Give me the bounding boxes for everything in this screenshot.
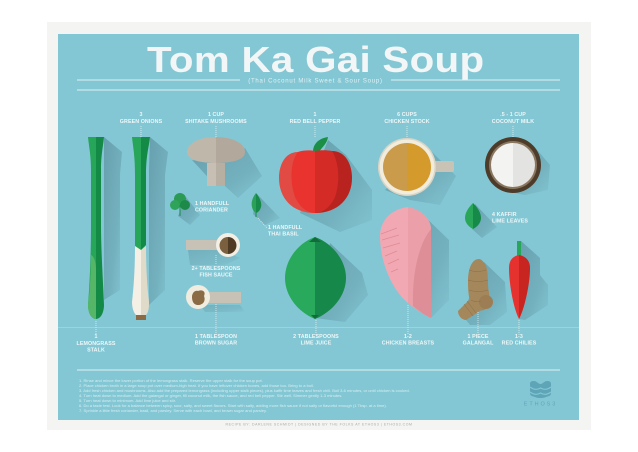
ingredient: brown sugar spoon: BROWN SUGAR [195,340,237,346]
ingredient: chicken breast [380,207,449,346]
ingredient: coconut milk: .5 - 1 CUP [500,112,526,118]
ingredient: green onion: 3 [139,112,143,118]
ingredient: lemongrass: 1 [94,334,98,340]
ingredient: thai basil [252,193,303,238]
ingredient: red bell pepper: RED BELL PEPPER [290,119,340,125]
recipe instructions: 3. Add fresh chicken and mushrooms. Also add the prepared lemongrass (including upper stalk pieces), plus kaffir lime leaves and fresh chili. Boil 3-6 minutes, or until chicken is cooked. [79,388,410,393]
poster background [58,34,579,420]
recipe instructions [79,378,410,413]
recipe instructions: 7. Sprinkle a little fresh coriander, basil, and parsley. Serve with each bowl, and brown sugar and parsley. [79,408,267,413]
ingredient: red chilies: RED CHILIES [502,340,537,346]
ingredient: red chilies: 1-3 [515,334,523,340]
ingredient: chicken stock: 6 CUPS [397,112,417,118]
ingredient: galangal [458,259,507,346]
recipe instructions: 6. Do a taste test. Look for a balance between spicy, sour, salty, and sweet flavors. Start with salty, adding more fish sauce if not salty or flavorful enough (1 Tbsp. at a time). [79,403,387,408]
ingredient: chicken stock: CHICKEN STOCK [384,119,430,125]
ingredient: fish sauce spoon [186,233,241,278]
recipe instructions: 4. Turn heat down to medium. Add the galangal or ginger, fill coconut milk, the fish sauce, and red bell pepper. Stir well. Simmer gently 1-3 minutes. [79,393,342,398]
ingredient: green onion [120,112,168,320]
ingredient: chicken stock [378,112,456,205]
ingredient: fish sauce spoon: 2+ TABLESPOONS [192,266,241,272]
baseline rule [58,326,579,329]
ingredient: shiitake mushroom: 1 CUP [208,112,224,118]
paper sheet [47,22,591,430]
recipe instructions: 1. Rinse and mince the lower portion of the lemongrass stalk. Reserve the upper stalk for the soup pot. [79,378,263,383]
ingredient: lemongrass: LEMONGRASS [77,341,116,347]
ethos3 logo: ETHOS3 [524,402,557,408]
ingredient: lemongrass: STALK [87,348,105,354]
ingredient: red chilies [502,241,548,346]
ethos3 logo [524,381,557,408]
ingredient: thai basil: 1 HANDFULL [268,225,303,231]
ingredient: red bell pepper [279,112,372,232]
ingredient: coconut milk [485,112,550,195]
title: Tom Ka Gai Soup [147,40,484,80]
ingredient: galangal: GALANGAL [463,340,494,346]
subtitle: (Thai Coconut Milk Sweet & Sour Soup) [248,78,383,84]
ingredient: fish sauce spoon: FISH SAUCE [199,272,233,278]
ingredient: coriander: CORIANDER [195,208,228,214]
ingredient: kaffir lime leaves: 4 KAFFIR [492,212,517,218]
ingredient: brown sugar spoon: 1 TABLESPOON [195,334,237,340]
recipe instructions: 5. Turn heat down to minimum. Add lime juice and stir. [79,398,176,403]
ingredient: lime [285,237,368,346]
ingredient: lime: LIME JUICE [301,340,332,346]
ingredient: red bell pepper: 1 [313,112,317,118]
ingredient: coriander: 1 HANDFULL [195,201,230,207]
ingredient: galangal: 1 PIECE [467,334,489,340]
footer credits: RECIPE BY: DARLENE SCHMIDT | DESIGNED BY THE FOLKS AT ETHOS3 | ETHOS3.COM [226,422,412,426]
ingredient: brown sugar spoon [186,285,245,346]
ingredient: chicken breast: CHICKEN BREASTS [382,340,435,346]
ingredient: thai basil: THAI BASIL [268,232,299,238]
recipe instructions: 2. Place chicken broth in a large soup pot over medium-high heat. If you have leftover chicken bones, add those too. Bring to a boil. [79,383,314,388]
ingredient: shiitake mushroom: SHITAKE MUSHROOMS [185,119,247,125]
ingredient: chicken breast: 1-2 [404,334,412,340]
ingredient: coconut milk: COCONUT MILK [492,119,534,125]
instructions rule [77,370,560,371]
ingredient: lime: 2 TABLESPOONS [293,334,339,340]
ingredient: coriander [170,193,230,225]
ingredient: shiitake mushroom [185,112,262,198]
ingredient: kaffir lime leaves: LIME LEAVES [492,218,528,224]
ingredient: green onion: GREEN ONIONS [120,119,163,125]
ingredient: kaffir lime leaves [465,203,528,238]
ingredient: lemongrass [77,137,122,354]
